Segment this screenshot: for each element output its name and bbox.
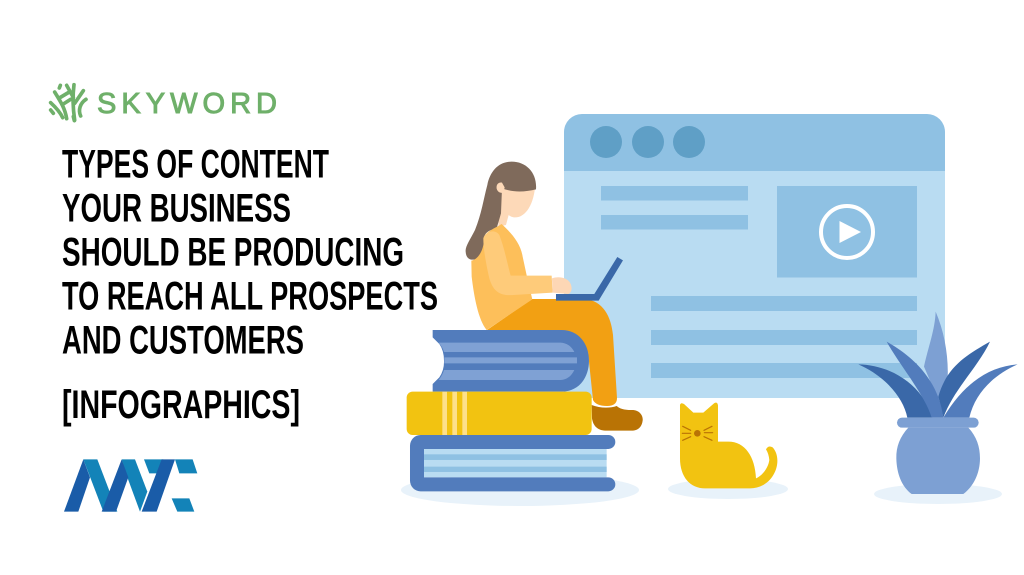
Skyword logo <box>51 85 277 121</box>
leaves <box>858 312 1018 418</box>
wordmark: SKYWORD <box>97 88 277 120</box>
text lines lower <box>651 296 917 378</box>
top blue book <box>433 330 589 392</box>
hair <box>466 162 536 260</box>
shoe <box>592 405 643 431</box>
middle yellow book <box>407 392 592 435</box>
title: TO REACH ALL PROSPECTS <box>62 274 438 318</box>
cat whiskers <box>682 426 713 440</box>
hand <box>552 277 572 294</box>
window buttons <box>590 126 705 158</box>
title <box>62 142 438 362</box>
ear <box>497 183 505 193</box>
face and neck <box>498 183 535 227</box>
bottom blue book <box>410 435 615 491</box>
title: SHOULD BE PRODUCING <box>62 230 404 274</box>
ground shadows <box>401 474 1002 506</box>
pot <box>896 418 980 494</box>
legs <box>487 299 617 406</box>
laptop <box>556 257 623 301</box>
browser window <box>564 114 945 398</box>
subtitle: infographics: [INFOGRAPHICS] <box>62 383 300 427</box>
title: YOUR BUSINESS <box>62 186 291 230</box>
cat <box>680 403 777 488</box>
MTC logo <box>64 459 197 512</box>
torso <box>471 224 532 330</box>
person with laptop <box>466 162 643 431</box>
title: TYPES OF CONTENT <box>62 142 329 186</box>
text lines upper <box>601 186 748 230</box>
stack of books <box>407 330 615 491</box>
potted plant <box>858 312 1018 494</box>
arm <box>483 231 553 295</box>
title: AND CUSTOMERS <box>62 318 304 362</box>
window header bar <box>564 114 945 171</box>
icon: Skyword tree <box>51 85 86 121</box>
cat nose <box>694 430 701 437</box>
window body <box>564 171 945 398</box>
video panel with play icon <box>777 186 917 278</box>
